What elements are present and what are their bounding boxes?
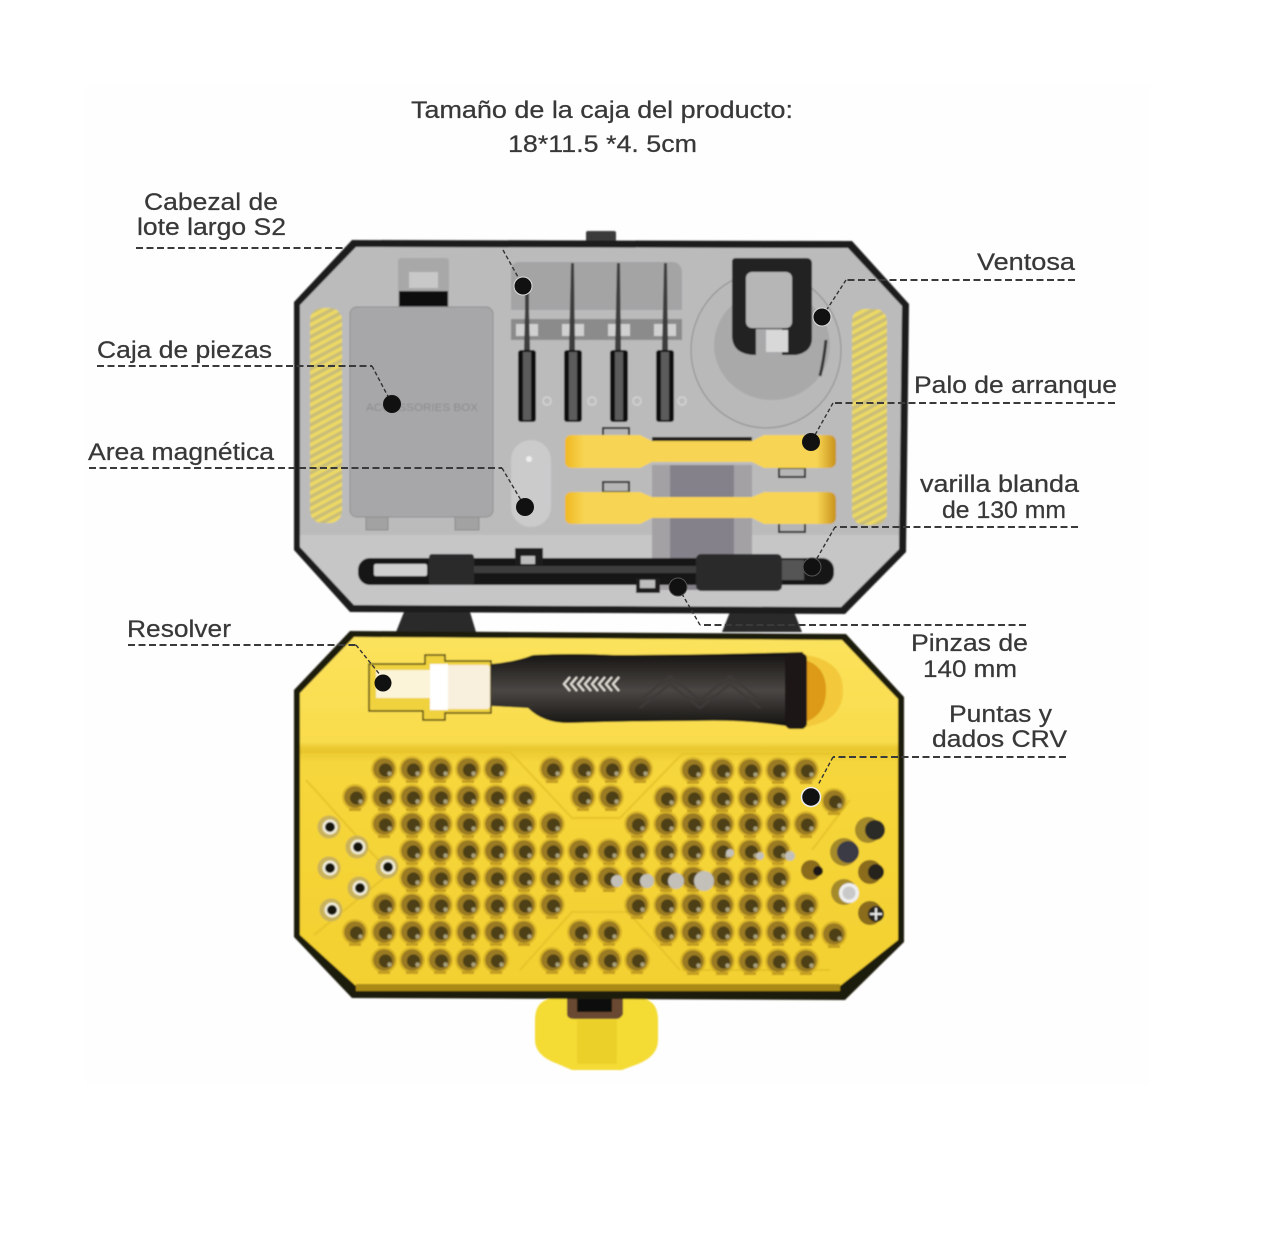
callout: Palo de arranque	[802, 372, 1117, 451]
ratchet wrench upper	[565, 428, 836, 477]
long bits tray	[511, 262, 686, 422]
handle end recess	[790, 654, 843, 728]
latch	[535, 998, 658, 1070]
sockets left	[318, 816, 398, 922]
callout: Puntas y dados CRV: Puntas y	[949, 701, 1052, 728]
screwdriver cutout	[369, 655, 491, 720]
callout: Resolver	[127, 616, 392, 692]
callout: Puntas y dados CRV: dados CRV	[932, 726, 1067, 753]
callout: varilla blanda de 130 mm: varilla blanda	[920, 471, 1080, 498]
callout: Pinzas de 140 mm: Pinzas de	[911, 630, 1028, 657]
callout: Area magnética: Area magnética	[88, 439, 275, 466]
toolbox: open case	[294, 231, 909, 1070]
lower tray	[294, 631, 904, 1070]
callout: varilla blanda de 130 mm	[803, 471, 1080, 576]
callout: Resolver: Resolver	[127, 616, 231, 643]
flexible shaft slot	[358, 548, 834, 593]
callout: Cabezal de lote largo S2: Cabezal de	[144, 189, 278, 216]
hatch strip right	[852, 309, 887, 525]
callout: Cabezal de lote largo S2	[136, 189, 532, 295]
upper lid	[294, 231, 909, 632]
background panel	[85, 85, 1150, 1085]
product box size heading	[411, 97, 793, 158]
callout: Pinzas de 140 mm	[669, 578, 1028, 683]
callout: Palo de arranque: Palo de arranque	[914, 372, 1117, 399]
bit grid	[342, 756, 847, 975]
product box size heading: Tamaño de la caja del producto:	[411, 97, 793, 124]
ratchet wrench lower	[565, 482, 836, 532]
centre column	[652, 465, 752, 590]
callout: Cabezal de lote largo S2: lote largo S2	[137, 214, 286, 241]
callout: Caja de piezas: Caja de piezas	[97, 337, 272, 364]
tray dividers	[300, 752, 886, 970]
callout: Area magnética	[88, 439, 534, 516]
hatch strip left	[310, 308, 342, 523]
screwdriver handle	[491, 652, 807, 729]
magnetic area	[511, 440, 551, 527]
callout: Pinzas de 140 mm: 140 mm	[923, 656, 1017, 683]
callout: Puntas y dados CRV	[802, 701, 1067, 806]
callout: Ventosa: Ventosa	[977, 249, 1076, 276]
parts box	[350, 258, 493, 530]
product box size heading: 18*11.5 *4. 5cm	[508, 131, 697, 158]
callout: Caja de piezas	[97, 337, 401, 413]
sockets right	[801, 817, 885, 925]
parts box: ACCESSORIES BOX	[366, 402, 479, 414]
callout: varilla blanda de 130 mm: de 130 mm	[942, 497, 1066, 524]
callout: Ventosa	[813, 249, 1076, 326]
suction cup	[691, 258, 841, 428]
